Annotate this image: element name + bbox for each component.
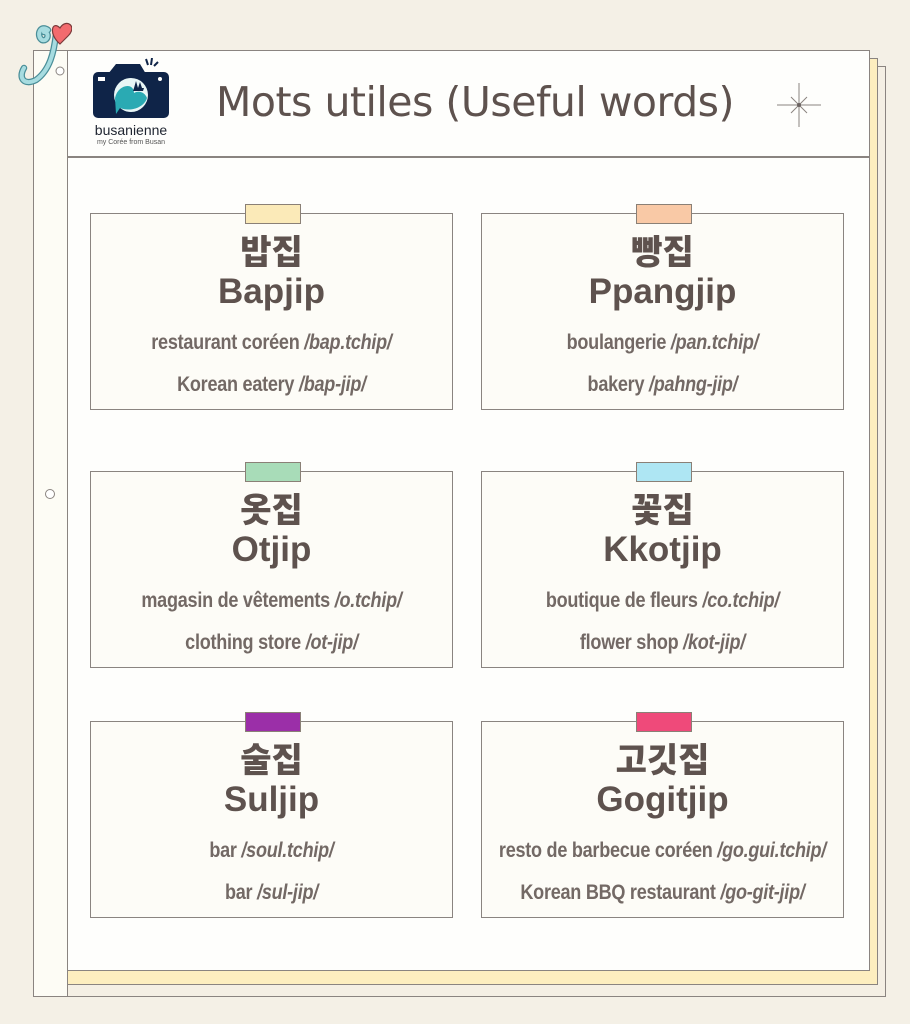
icon: paperclip with heart — [18, 22, 72, 86]
left margin strip — [33, 50, 68, 997]
card: Gogitjip: Korean BBQ restaurant /go-git-jip/ — [520, 881, 805, 904]
logo: busanienne — [93, 58, 169, 146]
header divider — [67, 156, 870, 158]
binder hole — [45, 489, 55, 499]
card: Suljip: Suljip — [224, 780, 319, 819]
card: Suljip — [90, 721, 453, 918]
tape — [636, 462, 692, 482]
card: Bapjip: Bapjip — [218, 272, 325, 311]
card: Otjip — [90, 471, 453, 668]
card: Otjip: 옷집 — [240, 483, 303, 532]
card: Bapjip: 밥집 — [240, 225, 303, 274]
tape — [245, 712, 301, 732]
card: Kkotjip: 꽃집 — [631, 483, 694, 532]
icon: sparkle — [777, 83, 821, 127]
card: Kkotjip: flower shop /kot-jip/ — [580, 631, 745, 654]
logo: busanienne: busanienne — [95, 122, 167, 138]
tape — [245, 204, 301, 224]
card: Bapjip: Korean eatery /bap-jip/ — [177, 373, 366, 396]
tape — [245, 462, 301, 482]
card: Ppangjip — [481, 213, 844, 410]
tape — [636, 204, 692, 224]
card: Otjip: clothing store /ot-jip/ — [185, 631, 358, 654]
card: Kkotjip: Kkotjip — [603, 530, 722, 569]
card: Gogitjip: Gogitjip — [596, 780, 729, 819]
card: Ppangjip: boulangerie /pan.tchip/ — [567, 331, 758, 354]
card: Bapjip — [90, 213, 453, 410]
card: Ppangjip: bakery /pahng-jip/ — [588, 373, 737, 396]
card: Suljip: bar /soul.tchip/ — [209, 839, 334, 862]
card: Suljip: bar /sul-jip/ — [225, 881, 318, 904]
card: Otjip: magasin de vêtements /o.tchip/ — [141, 589, 402, 612]
front page — [67, 50, 870, 971]
tape — [636, 712, 692, 732]
card: Gogitjip: 고깃집 — [616, 733, 709, 782]
logo: busanienne: my Corée from Busan — [97, 139, 165, 146]
card: Gogitjip: resto de barbecue coréen /go.gui.tchip/ — [499, 839, 826, 862]
card: Gogitjip — [481, 721, 844, 918]
card: Kkotjip: boutique de fleurs /co.tchip/ — [546, 589, 779, 612]
card: Suljip: 술집 — [240, 733, 303, 782]
card: Bapjip: restaurant coréen /bap.tchip/ — [151, 331, 392, 354]
card: Kkotjip — [481, 471, 844, 668]
card: Otjip: Otjip — [232, 530, 311, 569]
card: Ppangjip: Ppangjip — [589, 272, 736, 311]
title: Mots utiles (Useful words) — [216, 78, 734, 126]
card: Ppangjip: 빵집 — [631, 225, 694, 274]
